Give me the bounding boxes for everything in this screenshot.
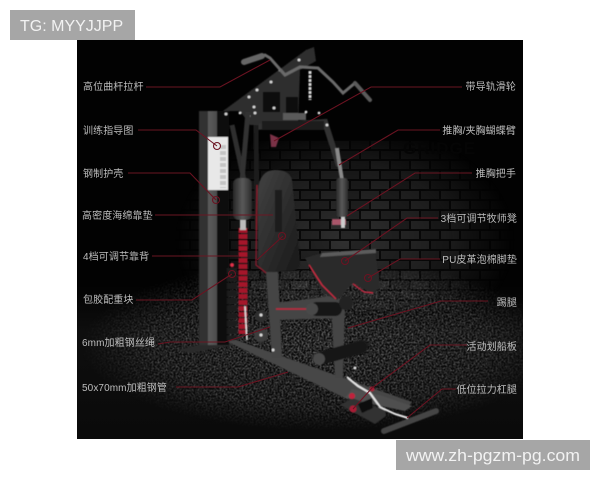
guide rods and left cylinder (232, 112, 257, 230)
seat uprights (254, 272, 356, 378)
labels: right column (441, 80, 517, 396)
labels: right column: 推胸/夹胸蝴蝶臂 (442, 124, 516, 137)
labels: right column: 低位拉力杠腿 (456, 383, 517, 396)
watermark tag: bottom right: www.zh-pgzm-pg.com (405, 447, 580, 465)
labels: right column: PU皮革泡棉脚垫 (442, 253, 517, 266)
labels: left column: 50x70mm加粗钢管 (82, 381, 167, 394)
labels: right column: 踢腿 (497, 297, 517, 309)
top frame (223, 47, 342, 180)
labels: right column: 3档可调节牧师凳 (441, 212, 517, 225)
watermark tag: top left: TG: MYYJJPP (20, 18, 123, 35)
weight stack column (199, 111, 247, 345)
labels: left column: 高密度海绵靠垫 (82, 209, 153, 222)
watermark tag: top left (10, 10, 135, 40)
labels: left column: 4档可调节靠背 (83, 250, 149, 263)
labels: left column: 6mm加粗钢丝绳 (82, 336, 155, 349)
labels: left column (82, 80, 167, 394)
instruction chart (208, 137, 228, 190)
panel: product photo background: GRIDGE (403, 139, 476, 158)
labels: right column: 推胸把手 (476, 167, 516, 180)
foot roller (313, 347, 361, 365)
illustration: multi-station gym machine (178, 47, 436, 431)
labels: right column: 带导轨滑轮 (466, 80, 516, 93)
labels: left column: 高位曲杆拉杆 (83, 80, 144, 93)
red callout leader lines (128, 60, 488, 418)
labels: left column: 训练指导图 (83, 124, 134, 137)
panel: product photo background (77, 40, 523, 439)
base beam and feet (178, 338, 436, 431)
back pad (256, 170, 300, 273)
labels: left column: 钢制护壳 (83, 167, 123, 180)
watermark tag: bottom right (396, 440, 590, 470)
right press handle (332, 178, 348, 228)
curved lat bar and chain (244, 55, 370, 100)
preacher curl pad (305, 249, 380, 300)
labels: left column: 包胶配重块 (83, 293, 134, 306)
rope and foot plate detail (347, 377, 408, 418)
seat pad and leg roller (276, 296, 353, 320)
labels: right column: 活动划船板 (466, 340, 517, 353)
